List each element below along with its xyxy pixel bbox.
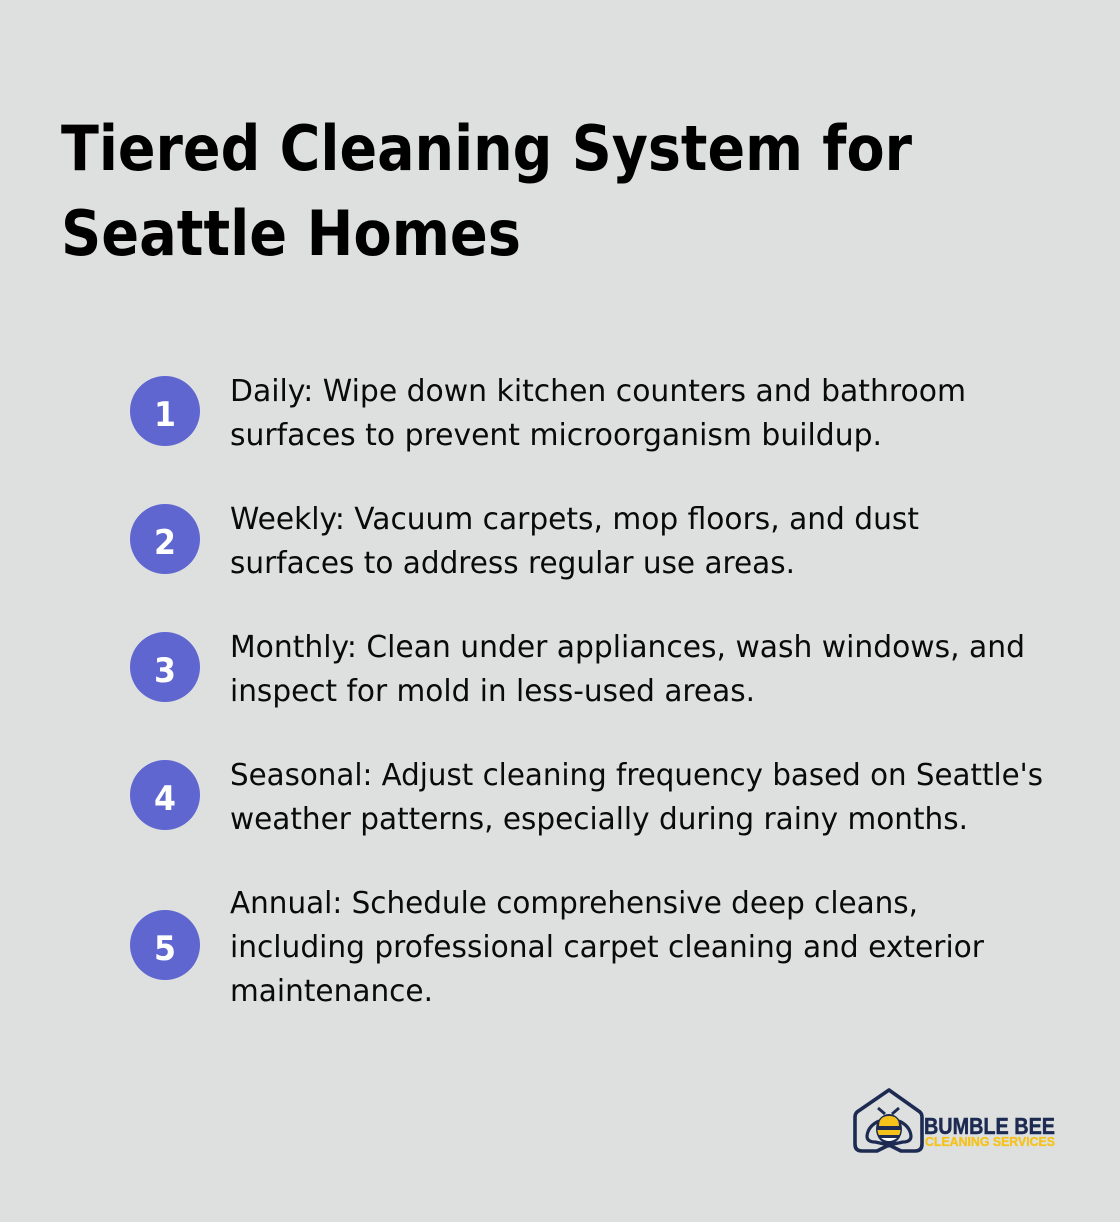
icon: house with bee — [855, 1090, 922, 1151]
number badge 5: 5 — [154, 929, 176, 969]
number badge 5 — [130, 910, 200, 980]
text: monthly: Monthly: Clean under appliances, wash windows, and — [230, 630, 1025, 665]
number badge 4 — [130, 760, 200, 830]
text: daily — [230, 374, 966, 453]
text: seasonal — [230, 758, 1043, 837]
title — [61, 112, 912, 270]
logo: Bumble Bee Cleaning Services — [855, 1090, 1055, 1151]
text: daily: surfaces to prevent microorganism buildup. — [230, 418, 882, 453]
text: weekly — [230, 502, 919, 581]
text: seasonal: Seasonal: Adjust cleaning frequency based on Seattle's — [230, 758, 1043, 793]
number badge 4: 4 — [154, 779, 176, 819]
text: weekly: surfaces to address regular use areas. — [230, 546, 795, 581]
text: annual: maintenance. — [230, 974, 433, 1009]
text: monthly — [230, 630, 1025, 709]
text: seasonal: weather patterns, especially during rainy months. — [230, 802, 968, 837]
title: Seattle Homes — [61, 197, 521, 270]
number badge 3 — [130, 632, 200, 702]
logo wordmark: BUMBLE BEE — [924, 1113, 1055, 1139]
text: annual — [230, 886, 985, 1009]
text: annual: Annual: Schedule comprehensive deep cleans, — [230, 886, 918, 921]
number badge 2 — [130, 504, 200, 574]
number badge 1 — [130, 376, 200, 446]
title: Tiered Cleaning System for — [61, 112, 912, 185]
logo tagline: CLEANING SERVICES — [925, 1135, 1055, 1149]
list item 5: annual — [130, 886, 985, 1009]
text: weekly: Weekly: Vacuum carpets, mop floors, and dust — [230, 502, 919, 537]
text: daily: Daily: Wipe down kitchen counters and bathroom — [230, 374, 966, 409]
list item 1: daily — [130, 374, 966, 453]
list item 4: seasonal — [130, 758, 1043, 837]
number badge 1: 1 — [154, 395, 176, 435]
text: annual: including professional carpet cleaning and exterior — [230, 930, 985, 965]
number badge 2: 2 — [154, 523, 176, 563]
list item 2: weekly — [130, 502, 919, 581]
number badge 3: 3 — [154, 651, 176, 691]
text: monthly: inspect for mold in less-used areas. — [230, 674, 755, 709]
list item 3: monthly — [130, 630, 1025, 709]
